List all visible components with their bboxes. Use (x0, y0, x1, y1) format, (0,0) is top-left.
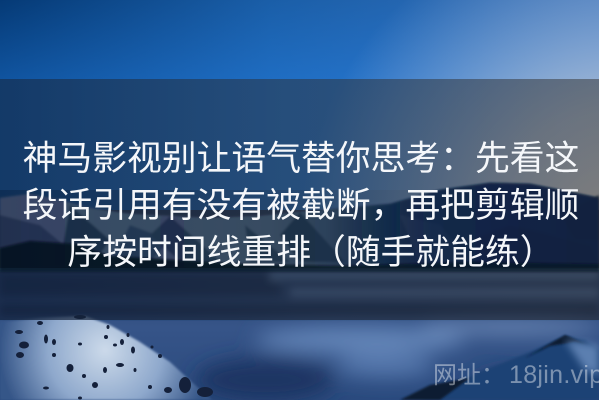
banner shading: clouds (0, 270, 599, 320)
watermark: 网址： (433, 362, 505, 389)
background: mountain range (0, 183, 599, 276)
background: snowy hill lower left (0, 315, 213, 400)
title line 1: 神马影视别让语气替你思考：先看这 (23, 139, 579, 178)
background: sea of clouds (0, 268, 599, 400)
translucent banner (0, 79, 599, 320)
background: snowy ridge lower right (400, 335, 599, 400)
title line 3: 序按时间线重排（随手就能练） (67, 233, 555, 272)
title line 2: 段话引用有没有被截断，再把剪辑顺 (23, 186, 579, 225)
banner shading: dark foot of the mountains (0, 241, 599, 272)
background: night sky (0, 0, 599, 210)
banner shading: mountain silhouette (0, 183, 599, 268)
title text (23, 139, 579, 272)
